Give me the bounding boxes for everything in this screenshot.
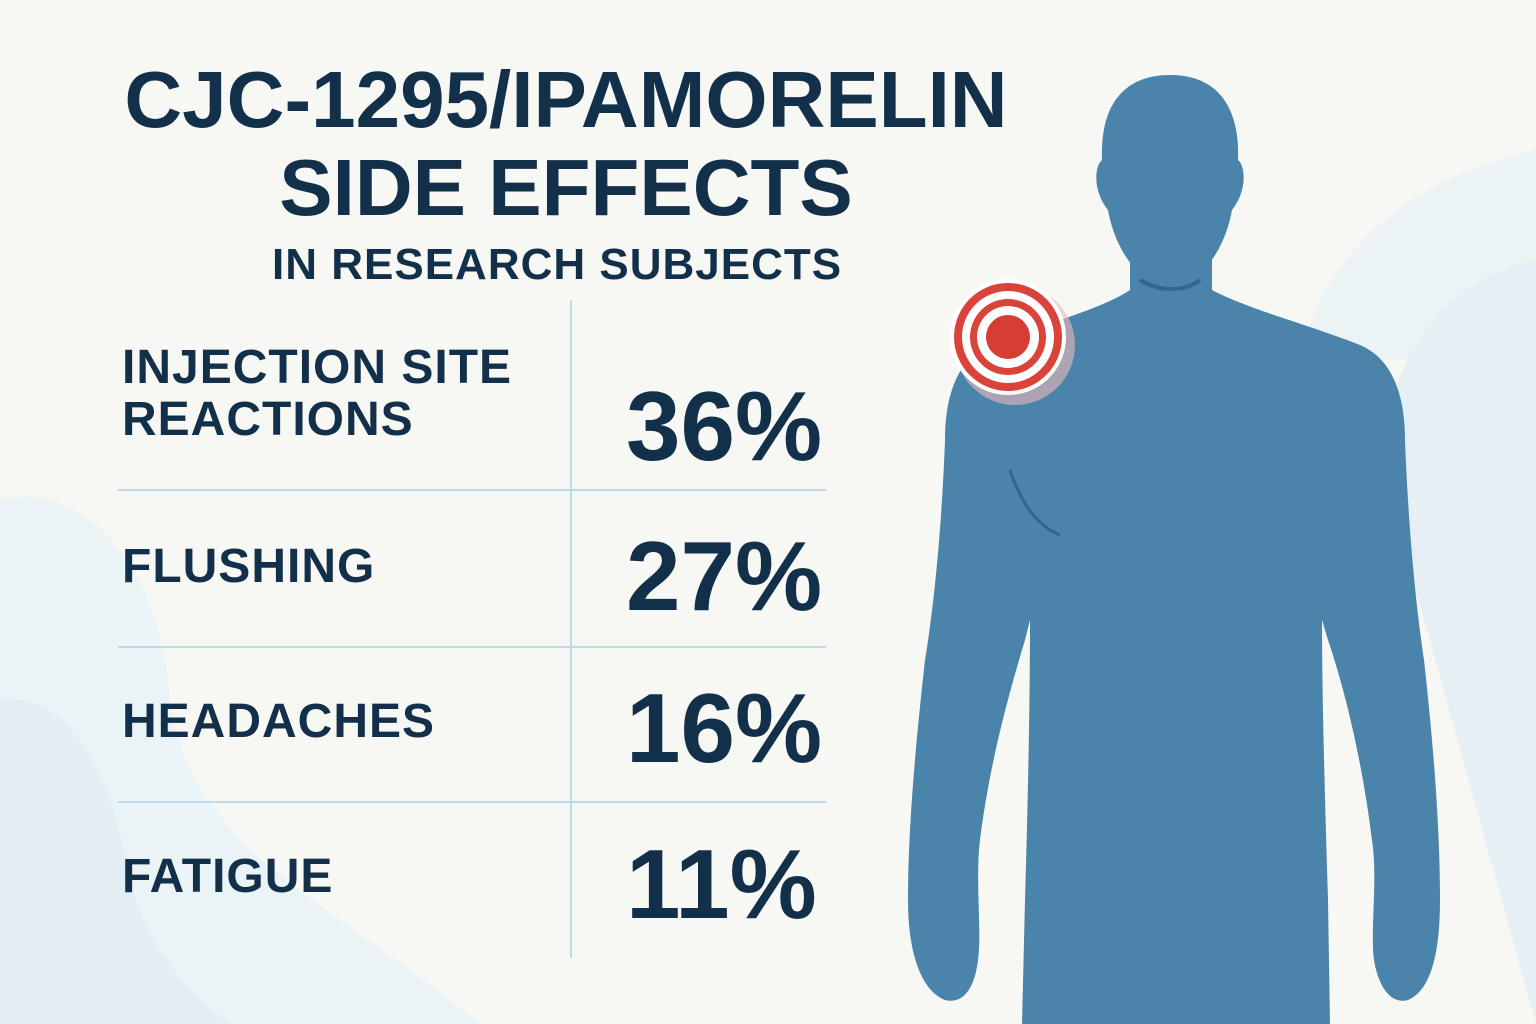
subtitle: IN RESEARCH SUBJECTS [272, 240, 842, 289]
value 16%: 16% [626, 673, 822, 783]
row: injection site reactions [122, 341, 512, 446]
row: fatigue: FATIGUE [122, 850, 333, 903]
table [118, 300, 826, 958]
row: flushing: FLUSHING [122, 540, 375, 593]
title: SIDE EFFECTS [279, 143, 853, 232]
value 11%: 11% [626, 829, 817, 939]
title: CJC-1295/IPAMORELIN [124, 55, 1008, 144]
row: headaches: HEADACHES [122, 695, 435, 748]
row: injection site reactions: INJECTION SITE [122, 341, 512, 394]
row: injection site reactions: REACTIONS [122, 393, 414, 446]
icon: injection target [950, 279, 1075, 405]
value 27%: 27% [626, 521, 822, 631]
value 36%: 36% [626, 371, 822, 481]
title [124, 55, 1008, 232]
